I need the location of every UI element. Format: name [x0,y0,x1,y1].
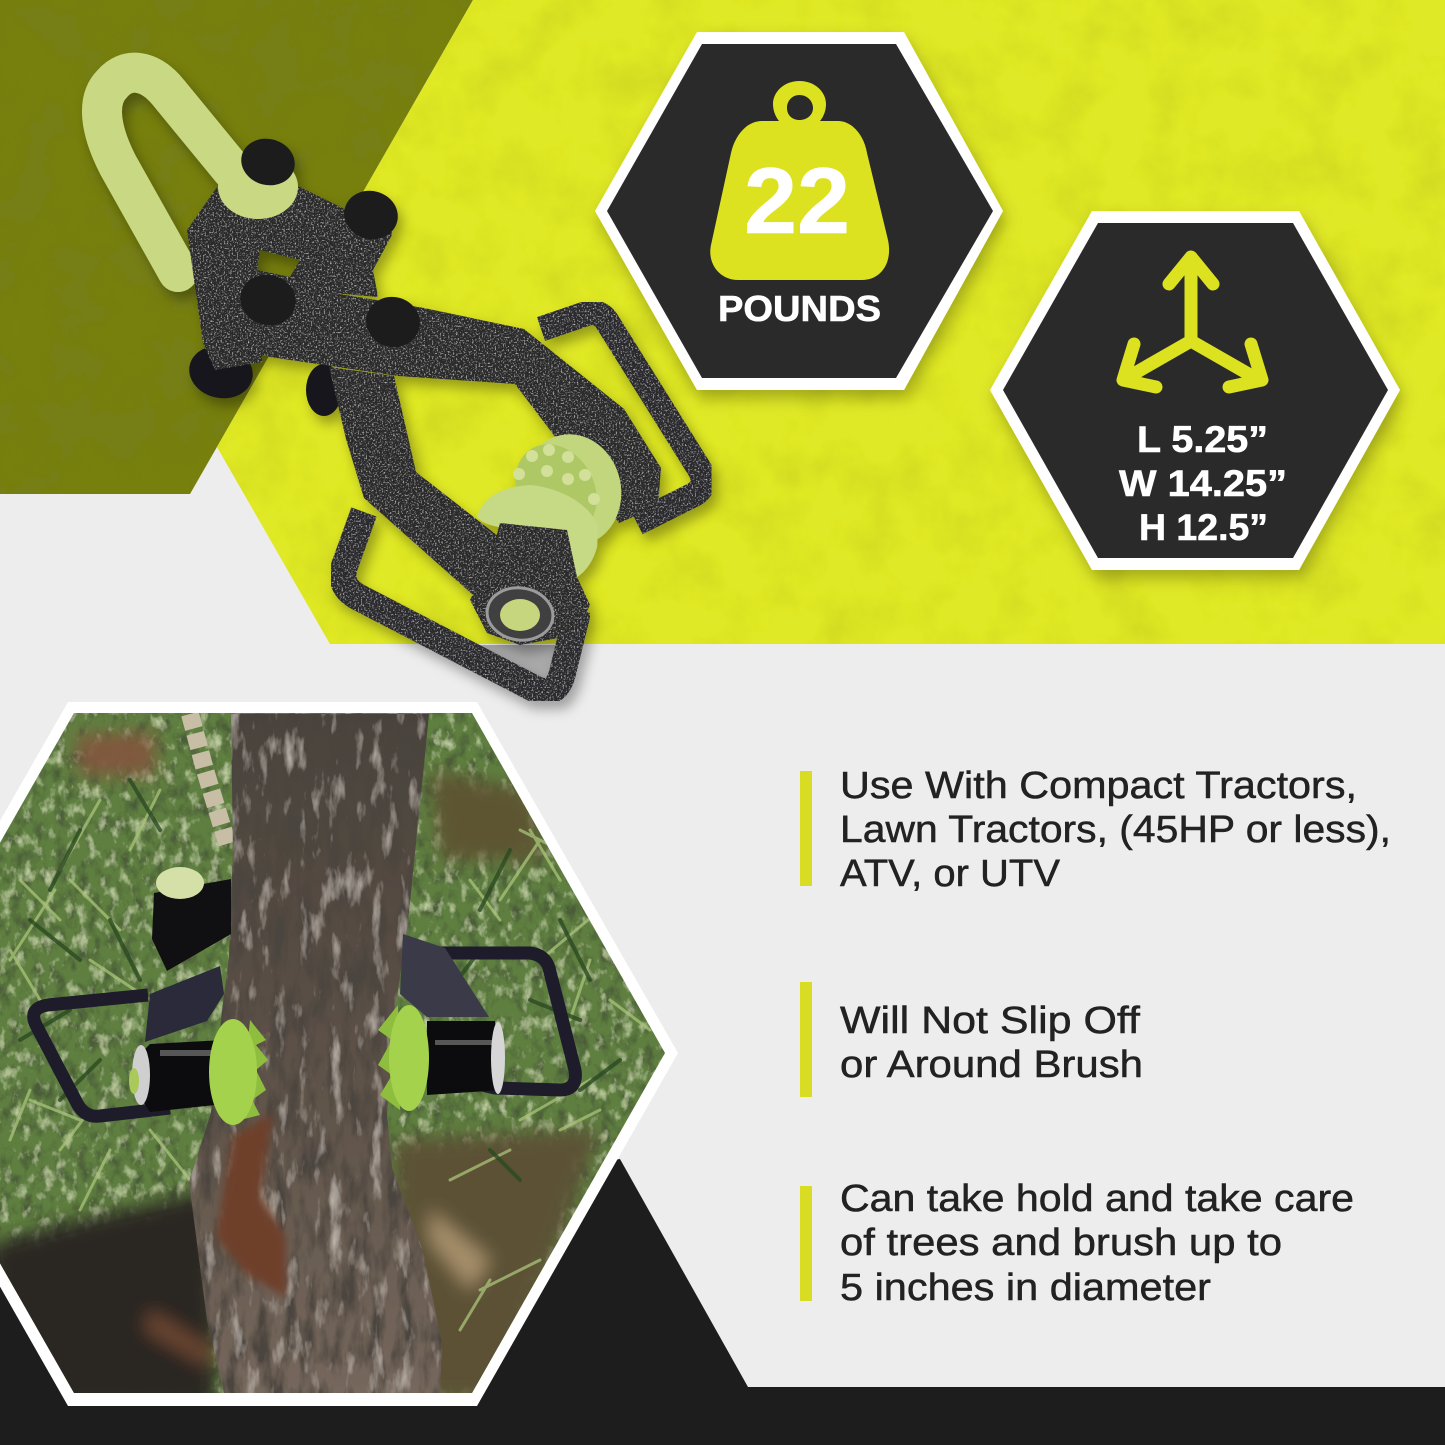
tree trunk [189,714,442,1393]
dimensions text: L 5.25” [1137,419,1268,460]
shackle [102,73,232,272]
end bushings [184,340,342,416]
feature text: Use With Compact Tractors, [840,765,1357,807]
cast shadow on concrete [463,645,562,690]
feature: capacity [800,1178,1354,1309]
tool: green pin cap [156,867,204,899]
product: tree grab tool [102,73,703,692]
panel: weight badge [595,32,1003,390]
black pin caps [234,133,426,353]
lower handle loop [343,512,578,692]
feature text: Will Not Slip Off [840,1000,1140,1042]
background: lime panel [217,0,1445,644]
photo white frame [0,702,678,1406]
feature: no slipping: or Around Brush [840,1044,1143,1086]
weight unit: POUNDS [718,288,881,329]
background: olive panel [0,0,473,494]
chain [190,714,228,846]
panel: dimensions badge: W 14.25” [1119,463,1287,504]
bark rust patch [216,1113,286,1297]
grass blades [10,790,650,1330]
accent bar [800,1186,812,1301]
feature: no slipping [800,982,1143,1097]
feature: tractor compatibility: ATV, or UTV [840,853,1061,895]
badge hexagon [990,211,1400,570]
accent bar [800,771,812,886]
soil and leaf litter [0,732,600,1410]
background: black base [0,1159,1445,1445]
lower jaw arm [329,367,498,594]
shackle eye [218,155,298,219]
feature text: Can take hold and take care [840,1178,1354,1220]
tool: left arm [34,966,268,1125]
feature: capacity: 5 inches in diameter [840,1267,1211,1309]
photo: tree grab in use [0,702,680,1410]
panel: dimensions badge [990,211,1400,570]
main jaw arm [218,287,661,523]
panel: dimensions badge: H 12.5” [1139,507,1268,548]
icon: three axis arrows [1123,257,1262,387]
weight value: 22 [744,148,850,253]
badge hexagon [595,32,1003,390]
icon: kettle weight [710,81,889,280]
right handle loop [541,313,703,523]
feature: tractor compatibility: Lawn Tractors, (45HP or less), [840,809,1391,851]
accent bar [800,982,812,1097]
feature: tractor compatibility [800,765,1391,895]
upper bracket [187,187,393,370]
tool: right arm [378,934,575,1111]
tool: upper bracket [152,879,231,971]
pivot bolt [484,584,556,644]
pivot cylinder [470,523,590,645]
green toothed gripper [477,425,632,577]
grass ground [0,705,680,1405]
feature: capacity: of trees and brush up to [840,1222,1282,1264]
